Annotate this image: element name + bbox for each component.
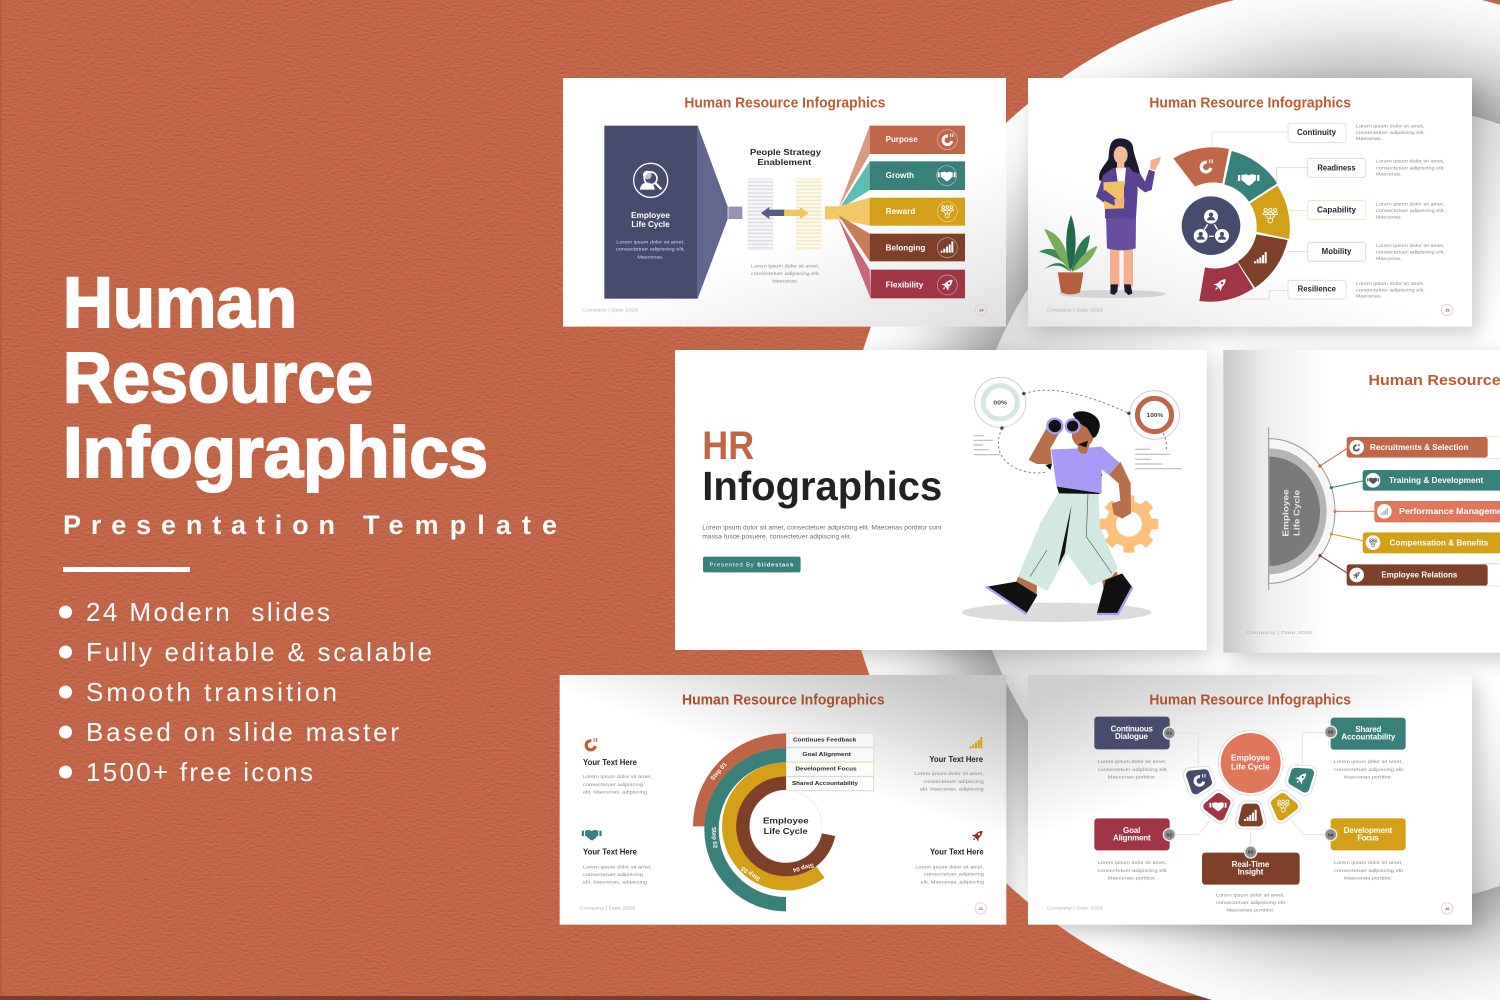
text block bottom right [915,828,986,886]
box: goal alignment: Maecenas porttitor. [1108,876,1156,882]
box: development focus: Development [1344,826,1393,835]
concentric step arcs [700,741,828,904]
label: resilience: Maecenas. [1356,294,1382,300]
feature list: 1500+ free icons [86,757,313,787]
box: shared accountability: Lorem ipsum dolor sit amet, [1334,759,1403,765]
panel: slide 21 concentric arcs [560,675,1006,925]
label: mobility: Mobility [1322,247,1352,256]
semicircle hub: Employee [1280,489,1290,537]
box: development focus: consectetuer adipiscing elit [1334,868,1404,874]
bar: employee relations [1347,564,1500,586]
feedback table: Shared Accountability [792,781,859,787]
label: readiness: Maecenas. [1376,172,1402,178]
label: readiness: Lorem ipsum dolor sit amet, [1376,159,1444,165]
main title: Resource [63,339,373,418]
bar: performance [1374,501,1500,522]
band: purpose: Purpose [886,135,918,144]
box: shared accountability: Accountability [1341,733,1396,742]
text block bottom right: Lorem ipsum dolor sit amet, [915,864,984,870]
connector lines [1175,733,1325,846]
label: mobility: Maecenas. [1376,256,1402,262]
main title: Human [63,264,297,343]
feedback table: Development Focus [795,767,857,773]
hero heading: Infographics [702,463,942,509]
petal: rocket [1289,766,1314,791]
footer: 15 [1445,308,1450,313]
connector lines [1212,132,1308,299]
illustration: walking man with binoculars [962,411,1158,622]
feature list [59,597,432,787]
footer: Company | Date 2026 [1246,630,1313,636]
center circle: Employee [1231,754,1271,763]
panel: hero slide [675,350,1207,650]
hero body text: massa fusce posuere. consectetuer adipiscing elit. [702,535,852,541]
box: development focus: Maecenas porttitor. [1344,876,1392,882]
band: flexibility [871,270,965,298]
label: mobility [1308,242,1445,262]
center life cycle circle: Employee [763,816,809,826]
semicircle hub: Life Cycle [1291,490,1301,536]
label: capability: Capability [1317,206,1357,215]
progress circle 100%: 100% [1147,413,1163,419]
band: reward: Reward [886,207,915,216]
people strategy enablement [748,148,822,285]
employee life cycle block [604,126,742,299]
number badges: 01 [1167,731,1172,737]
text block bottom right: consectetuer adipiscing [924,872,984,878]
number badges [1163,726,1337,858]
box: shared accountability: consectetuer adipiscing elit [1334,767,1404,773]
feedback table: Continues Feedback [793,737,857,743]
box: shared accountability: Shared [1355,725,1381,734]
box: goal alignment [1094,818,1170,882]
label: resilience: Resilience [1298,285,1337,294]
label: continuity [1288,123,1425,142]
employee life cycle block: Lorem ipsum dolor sit amet, [616,239,685,245]
bar: recruitments: Recruitments & Selection [1370,443,1468,452]
panel: slide 14 funnel [563,78,1006,327]
hero heading [702,422,942,509]
subtitle: Template [363,510,557,540]
text block top right [914,737,984,793]
box: continuous dialogue: Continuous [1111,724,1154,733]
main title [63,264,488,493]
hero body text [702,526,941,541]
box: development focus [1331,818,1406,882]
box: continuous dialogue [1094,717,1170,781]
step labels: Step 02 [710,827,718,849]
bar: training [1363,470,1500,491]
donut segments [1173,147,1290,302]
label: continuity: Continuity [1297,128,1337,137]
text block bottom left [582,830,652,886]
label: continuity: consectetuer adipiscing elit. [1356,130,1425,136]
feature list: Based on slide master [86,717,399,747]
main title: Infographics [63,414,488,493]
box: development focus: Focus [1357,833,1379,842]
box: development focus: Lorem ipsum dolor sit amet, [1334,860,1403,866]
bar: compensation [1363,532,1500,553]
label: resilience [1288,280,1425,300]
text block top left: Your Text Here [583,758,638,767]
text block bottom right: Your Text Here [930,847,984,856]
text block top right: Your Text Here [929,755,984,764]
people strategy enablement: Enablement [757,158,812,167]
text block bottom left: Your Text Here [583,847,638,856]
bar: training: Training & Development [1389,476,1484,485]
number badges: 03 [1248,850,1254,856]
text block bottom left: elit. Maecenas. adipiscing [583,880,647,886]
slide title: Human Resource Infographics [1149,95,1351,112]
step labels [710,761,814,881]
label: readiness: Readiness [1317,163,1356,172]
text block top left: elit. Maecenas. adipiscing [583,790,647,796]
illustration: woman [1096,138,1161,295]
footer: Company | Date 2026 [1047,905,1103,911]
step labels: Step 03 [740,864,762,881]
label: resilience: consectetuer adipiscing elit. [1356,288,1425,294]
center people circle [1182,196,1240,255]
label: capability: consectetuer adipiscing elit. [1376,208,1445,214]
progress circle 100% [1130,391,1179,439]
band: flexibility: Flexibility [886,281,924,290]
petal: magnet [1190,770,1209,790]
feature list: Fully editable & scalable [86,637,432,667]
number badges: 05 [1328,730,1334,736]
text block top left [583,738,652,796]
box: real-time insight: Lorem ipsum dolor sit amet, [1216,892,1285,898]
step labels: Step 01 [710,761,729,782]
footer: Company | Date 2026 [582,308,638,314]
text block bottom right: elit. Maecenas. adipiscing [921,880,984,886]
people strategy enablement: consectetuer adipiscing elit. [751,271,820,277]
footer: Company | Date 2026 [579,905,636,911]
feedback table: Goal Alignment [802,752,851,758]
bar: recruitments [1347,436,1500,459]
illustration: plant [1039,215,1166,298]
label: readiness: consectetuer adipiscing elit. [1376,165,1445,171]
label: mobility: Lorem ipsum dolor sit amet, [1376,243,1444,249]
box: continuous dialogue: Maecenas porttitor. [1108,775,1156,781]
left heading block [59,264,557,787]
center life cycle circle: Life Cycle [764,826,808,836]
feedback table [786,733,874,791]
label: readiness [1308,158,1445,178]
box: continuous dialogue: Dialogue [1115,732,1149,741]
panel: slide employee life cycle bars (cropped) [1223,350,1500,653]
subtitle [63,510,557,540]
hero body text: Lorem ipsum dolor sit amet, consectetuer adipiscing elit. Maecenas porttitor coni [702,526,941,532]
box: goal alignment: Lorem ipsum dolor sit amet, [1098,860,1166,866]
number badges: 04 [1328,832,1334,838]
band: growth [870,161,965,190]
box: continuous dialogue: consectetuer adipiscing elit [1098,767,1167,773]
center life cycle circle [750,790,822,862]
footer [1047,304,1453,316]
bar: performance: Performance Management [1399,507,1500,516]
label: resilience: Lorem ipsum dolor sit amet, [1356,281,1424,287]
text block top right: consectetuer adipiscing [923,779,984,785]
footer: Company | Date 2026 [1047,308,1103,314]
box: real-time insight: consectetuer adipiscing elit [1216,900,1286,906]
box: real-time insight [1202,853,1300,914]
box: real-time insight: Real-Time [1232,860,1270,869]
petal: chart [1243,808,1259,822]
label: capability: Lorem ipsum dolor sit amet, [1376,202,1444,208]
band: reward [870,198,965,226]
band: belonging: Belonging [886,243,925,252]
progress circle 00%: 00% [993,400,1007,406]
box: shared accountability: Maecenas porttitor. [1344,775,1392,781]
progress circle 00% [975,377,1026,427]
presented by button: Presented By Slidestack [709,563,794,569]
dashed connectors and text lines [974,390,1182,473]
employee life cycle block: Employee [631,211,671,220]
box: shared accountability [1331,718,1406,781]
semicircle hub [1268,427,1335,590]
slide title: Human Resource Infographics [684,95,885,112]
label: continuity: Lorem ipsum dolor sit amet, [1356,123,1424,129]
footer: 10 [1445,906,1450,911]
band: growth: Growth [886,171,914,180]
employee life cycle block: Life Cycle [631,220,670,229]
petal: handshake [1205,794,1231,820]
step labels: Step 04 [792,861,814,873]
petal: team [1272,794,1295,818]
band: purpose [870,126,965,154]
text block bottom left: consectetuer adipiscing [583,872,643,878]
center circle [1218,731,1283,795]
box: goal alignment: Alignment [1113,833,1151,842]
box: continuous dialogue: Lorem ipsum dolor sit amet, [1098,759,1166,765]
footer: 14 [979,308,984,313]
panel: slide 15 radial segments [1028,78,1472,327]
footer [579,903,986,914]
employee life cycle block: Maecenas. [637,254,663,260]
box: goal alignment: consectetuer adipiscing elit [1098,868,1167,874]
bar: compensation: Compensation & Benefits [1390,538,1489,547]
slide title: Human Resource Infographics [682,692,885,709]
number badges: 02 [1167,832,1172,838]
text block top right: Lorem ipsum dolor sit amet, [914,771,984,777]
people strategy enablement: Maecenas. [772,279,798,285]
feature list: Smooth transition [86,677,337,707]
text block top right: elit. Maecenas. adipiscing [920,787,984,793]
subtitle: Presentation [63,510,335,540]
text block top left: Lorem ipsum dolor sit amet, [583,774,652,780]
bar: employee relations: Employee Relations [1381,571,1458,580]
hero heading: HR [702,422,754,468]
footer [1047,903,1453,914]
box: real-time insight: Maecenas porttitor. [1226,908,1275,914]
footer: 21 [979,906,984,911]
divider [63,567,190,572]
box: real-time insight: Insight [1238,868,1264,877]
fan connectors [825,126,871,298]
label: continuity: Maecenas. [1356,136,1382,142]
label: mobility: consectetuer adipiscing elit. [1376,250,1445,256]
slide title: Human Resource Infographics [1149,692,1351,709]
text block bottom left: Lorem ipsum dolor sit amet, [583,864,652,870]
feature list: 24 Modern slides [86,597,330,627]
slide title: Human Resource [1368,372,1500,389]
text block top left: consectetuer adipiscing [583,782,643,788]
employee life cycle block: consectetuer adipiscing elit. [616,247,685,253]
presented by button [703,557,801,572]
people strategy enablement: Lorem ipsum dolor sit amet, [751,263,819,269]
box: goal alignment: Goal [1123,826,1140,835]
center circle: Life Cycle [1231,762,1270,771]
connectors [1318,449,1374,573]
label: capability: Maecenas. [1376,214,1402,220]
panel: slide 10 petals [1028,675,1472,925]
people strategy enablement: People Strategy [750,148,822,157]
band: belonging [870,234,965,261]
footer [582,304,987,316]
label: capability [1308,201,1445,220]
